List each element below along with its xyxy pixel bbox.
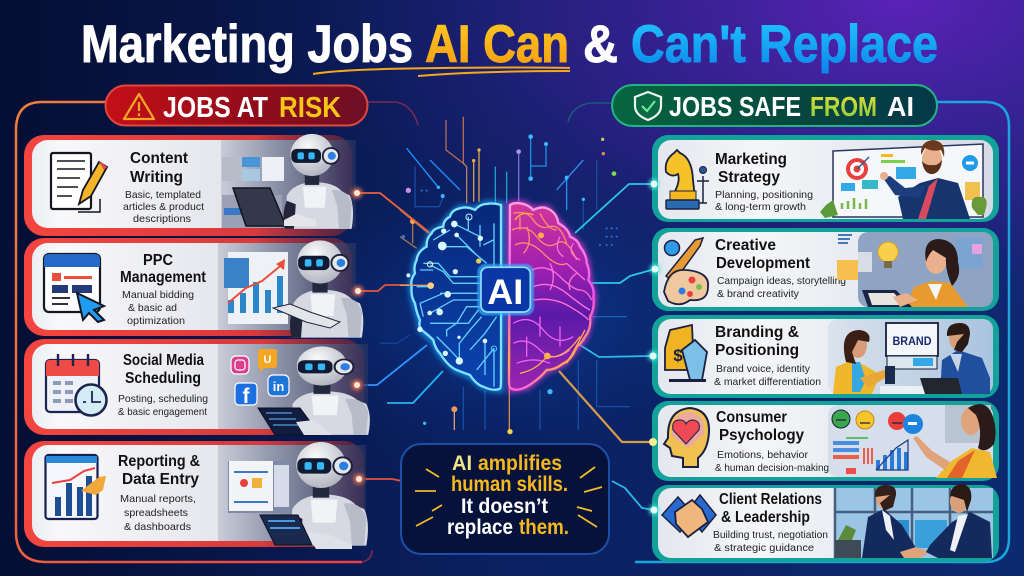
illustration: strategist at whiteboard bbox=[820, 140, 987, 219]
label: client relations and leadership: & strategic guidance bbox=[714, 542, 814, 554]
label: content writing: Writing bbox=[130, 169, 183, 186]
decorative rays bbox=[415, 467, 602, 527]
icon: price tag and building: $ bbox=[673, 346, 683, 365]
connector dots bbox=[352, 179, 660, 515]
label: reporting and data entry: Data Entry bbox=[122, 471, 199, 488]
icon: warning triangle bbox=[124, 94, 154, 119]
label: creative development bbox=[715, 237, 846, 300]
label: marketing strategy: Strategy bbox=[718, 169, 780, 186]
title: AI Can bbox=[425, 15, 569, 74]
heading pill: jobs safe from AI bbox=[612, 85, 937, 126]
label: ppc management: optimization bbox=[127, 315, 185, 327]
label: branding and positioning bbox=[714, 324, 821, 388]
icon: browser with cursor bbox=[44, 254, 104, 322]
label: creative development: Campaign ideas, storytelling bbox=[717, 275, 846, 287]
panel frame bbox=[635, 102, 1009, 562]
callout text: human skills. bbox=[451, 473, 568, 496]
heading pill: jobs safe from AI: JOBS SAFE bbox=[669, 91, 801, 122]
brain bbox=[400, 203, 594, 390]
icons: social media logos: in bbox=[273, 379, 284, 394]
label: client relations and leadership: & Leadership bbox=[721, 509, 810, 526]
label: consumer psychology bbox=[715, 409, 829, 474]
connector: reporting to callout bbox=[359, 479, 402, 481]
label: marketing strategy: & long-term growth bbox=[715, 201, 806, 213]
label: social media scheduling: Posting, scheduling bbox=[118, 393, 208, 405]
label: creative development: & brand creativity bbox=[717, 288, 800, 300]
connector: marketing strategy to brain bbox=[575, 184, 654, 233]
label: ppc management: Manual bidding bbox=[122, 289, 194, 301]
panel: jobs at risk bbox=[16, 86, 418, 562]
label: branding and positioning: Positioning bbox=[715, 342, 799, 359]
label: client relations and leadership: Building trust, negotiation bbox=[713, 529, 828, 541]
heading pill: jobs safe from AI: FROM bbox=[810, 91, 877, 122]
label: social media scheduling: & basic engagement bbox=[118, 406, 207, 418]
illustration: analyst with emotion chart bbox=[832, 404, 997, 478]
label: consumer psychology: & human decision-making bbox=[715, 462, 829, 474]
label: ppc management: & basic ad bbox=[128, 302, 177, 314]
card: reporting and data entry bbox=[24, 441, 368, 549]
connector: lower cyan trace bbox=[387, 371, 443, 403]
connector: creative development to brain bbox=[592, 269, 655, 283]
label: branding and positioning: Branding & bbox=[715, 324, 799, 341]
label: social media scheduling bbox=[118, 352, 208, 418]
label: creative development: Creative bbox=[715, 237, 776, 254]
icon: head with heart bbox=[664, 408, 709, 467]
title: & bbox=[583, 15, 618, 74]
illustration: robot with dashboard bbox=[228, 442, 368, 549]
illustration: robot at laptop bbox=[222, 134, 353, 229]
card: branding and positioning bbox=[652, 315, 999, 398]
connector: content writing to brain bbox=[357, 193, 430, 233]
heading pill: jobs at risk bbox=[106, 86, 368, 126]
card: marketing strategy bbox=[652, 135, 999, 222]
label: reporting and data entry: spreadsheets bbox=[124, 507, 188, 519]
AI chip bbox=[477, 264, 534, 315]
heading pill: jobs at risk: RISK bbox=[279, 92, 341, 124]
connector lines bbox=[357, 184, 655, 510]
label: consumer psychology: Consumer bbox=[716, 409, 787, 426]
label: content writing: Content bbox=[130, 150, 188, 167]
card: client relations and leadership bbox=[652, 484, 999, 562]
label: marketing strategy bbox=[715, 151, 813, 213]
icons: social media logos: U bbox=[264, 354, 272, 366]
label: client relations and leadership: Client Relations bbox=[719, 491, 822, 508]
heading pill: jobs at risk: JOBS AT bbox=[163, 92, 268, 124]
label: ppc management: PPC bbox=[143, 252, 173, 269]
left hemisphere bbox=[400, 204, 501, 390]
callout text: replace bbox=[447, 516, 513, 539]
label: social media scheduling: Scheduling bbox=[125, 370, 201, 387]
right hemisphere bbox=[509, 203, 594, 390]
label: content writing bbox=[123, 150, 204, 225]
title: Marketing Jobs bbox=[81, 15, 413, 74]
label: ppc management: Management bbox=[120, 269, 206, 286]
icon: shield with check bbox=[635, 92, 661, 120]
panel frame bbox=[16, 102, 362, 562]
title underline bbox=[313, 68, 570, 76]
callout: AI amplifies human skills bbox=[401, 444, 609, 554]
illustration: robot with growth chart bbox=[224, 240, 363, 338]
label: branding and positioning: Brand voice, identity bbox=[716, 363, 811, 375]
connector: callout to client relations bbox=[612, 481, 654, 510]
card: ppc management bbox=[24, 238, 363, 338]
callout text: It doesn’t bbox=[461, 495, 548, 518]
illustration: two businessmen shaking hands bbox=[835, 484, 993, 558]
callout text: AI bbox=[452, 452, 472, 475]
callout text bbox=[447, 452, 569, 539]
label: reporting and data entry bbox=[118, 453, 200, 533]
icon: price tag and building bbox=[665, 325, 707, 382]
label: consumer psychology: Emotions, behavior bbox=[717, 449, 808, 461]
label: branding and positioning: & market differentiation bbox=[714, 376, 821, 388]
label: ppc management bbox=[120, 252, 206, 327]
icon: report chart bbox=[46, 455, 106, 519]
illustration: brand meeting bbox=[833, 323, 990, 394]
icon: chess knight bbox=[666, 150, 709, 209]
connector: consumer psychology to brain bbox=[559, 371, 653, 442]
icon: document and pencil bbox=[51, 153, 107, 212]
label: creative development: Development bbox=[716, 255, 810, 272]
connector: social media to brain bbox=[357, 345, 427, 385]
label: reporting and data entry: Reporting & bbox=[118, 453, 200, 470]
icon: handshake bbox=[662, 495, 716, 537]
AI chip: AI bbox=[487, 273, 523, 312]
illustration: robot with tablet bbox=[258, 346, 370, 435]
card: consumer psychology bbox=[652, 401, 999, 481]
title: Can't Replace bbox=[631, 15, 938, 74]
card: social media scheduling bbox=[24, 339, 370, 435]
label: content writing: articles & product bbox=[123, 201, 204, 213]
connector: ppc to brain bbox=[358, 285, 430, 291]
label: reporting and data entry: & dashboards bbox=[124, 521, 191, 533]
callout text: amplifies bbox=[478, 452, 562, 475]
label: content writing: Basic, templated bbox=[125, 189, 201, 201]
label: consumer psychology: Psychology bbox=[719, 427, 804, 444]
connector: branding to brain bbox=[580, 345, 653, 357]
heading pill: jobs safe from AI: AI bbox=[887, 91, 914, 122]
icon: palette and brush bbox=[664, 238, 708, 304]
label: marketing strategy: Planning, positioning bbox=[715, 189, 813, 201]
icons: social media logos bbox=[231, 349, 289, 408]
label: social media scheduling: Social Media bbox=[123, 352, 204, 369]
illustration: brand meeting: BRAND bbox=[892, 334, 932, 348]
callout text: them. bbox=[519, 516, 569, 539]
title bbox=[81, 15, 938, 76]
card: content writing bbox=[24, 134, 356, 236]
label: content writing: descriptions bbox=[133, 213, 191, 225]
icons: social media logos: f bbox=[242, 385, 250, 408]
icon: calendar and clock bbox=[46, 354, 106, 416]
card: creative development bbox=[652, 228, 999, 311]
label: marketing strategy: Marketing bbox=[715, 151, 787, 168]
label: client relations and leadership bbox=[713, 491, 828, 554]
illustration: woman with lightbulb idea bbox=[837, 235, 983, 307]
panel: jobs safe from AI bbox=[568, 85, 1009, 562]
circuit background lines bbox=[380, 117, 630, 434]
label: reporting and data entry: Manual reports, bbox=[120, 493, 196, 505]
